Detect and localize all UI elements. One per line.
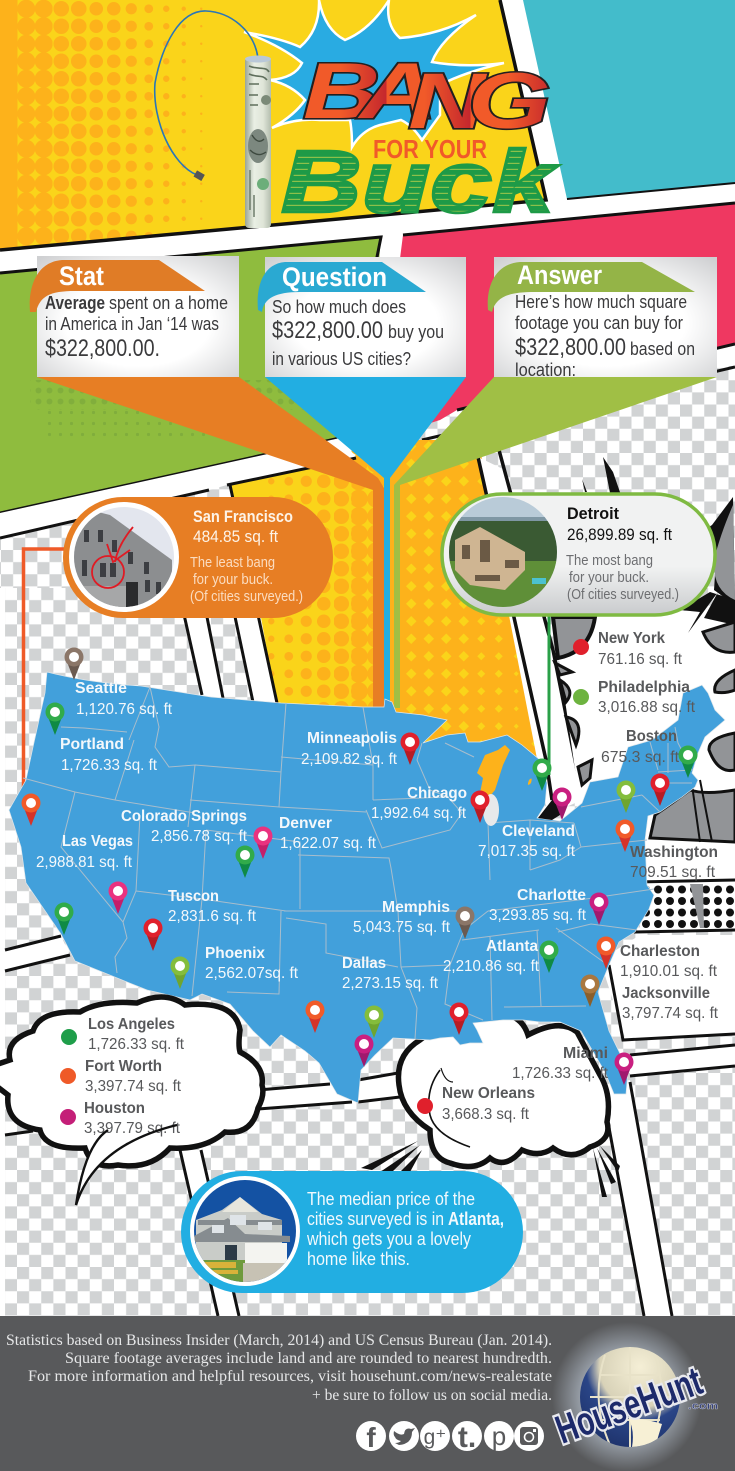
label: Los Angeles: 1,726.33 sq. ft <box>88 1036 185 1053</box>
pin: Seattle <box>64 648 84 680</box>
label: Los Angeles: Los Angeles <box>88 1016 175 1033</box>
footer <box>0 1316 735 1471</box>
text: San Francisco: 484.85 sq. ft <box>193 527 278 546</box>
label: Fort Worth: 3,397.74 sq. ft <box>85 1078 182 1095</box>
text: question body: buy you <box>388 322 444 342</box>
checkerboard backdrop: upper <box>0 366 735 588</box>
pins: map markers <box>22 648 698 1085</box>
label: Fort Worth <box>85 1058 182 1095</box>
label: Boston <box>601 728 680 766</box>
panel: centre halftone <box>232 440 537 757</box>
photo: San Francisco building <box>74 507 174 607</box>
text: Detroit: Detroit <box>567 504 619 523</box>
label: Boston: 675.3 sq. ft <box>601 749 680 766</box>
label: Philadelphia: Philadelphia <box>598 679 690 696</box>
text: answer body: based on <box>630 339 695 359</box>
halftone strip right <box>634 880 735 932</box>
label: Phoenix: 2,562.07sq. ft <box>205 965 299 982</box>
label: Colorado Springs <box>121 808 248 845</box>
label: Atlanta: 2,210.86 sq. ft <box>443 958 540 975</box>
label: Memphis: Memphis <box>382 899 450 916</box>
label: Dallas: 2,273.15 sq. ft <box>342 975 439 992</box>
funnel: blue <box>265 377 466 708</box>
label: Washington: 709.51 sq. ft <box>630 864 716 881</box>
label: New Orleans <box>442 1085 535 1123</box>
pin: Phoenix <box>170 956 190 989</box>
text: stat body: $322,800.00. <box>45 335 160 362</box>
label: Dallas <box>342 955 439 992</box>
text: sources <box>6 1332 552 1404</box>
text: San Francisco: The least bang <box>190 554 275 571</box>
pin: Detroit <box>532 758 552 791</box>
label: Atlanta <box>443 938 540 975</box>
New Orleans speech cloud <box>361 1014 620 1197</box>
label: Tuscon: 2,831.6 sq. ft <box>168 908 257 925</box>
text: Detroit: 26,899.89 sq. ft <box>567 525 672 544</box>
pin: Memphis <box>456 906 474 939</box>
text: Detroit: (Of cities surveyed.) <box>567 586 679 603</box>
pin: Charleston <box>596 936 616 969</box>
label: Jacksonville: 3,797.74 sq. ft <box>622 1005 719 1022</box>
funnel: green <box>394 377 717 708</box>
label: Las Vegas: Las Vegas <box>62 833 133 850</box>
text: answer body: $322,800.00 <box>515 334 626 361</box>
panel: Answer card <box>488 257 717 380</box>
label: Chicago <box>371 785 467 822</box>
pin: Washington <box>616 820 634 852</box>
text: question body <box>272 297 444 369</box>
label: Phoenix: Phoenix <box>205 945 265 962</box>
callout: median price <box>181 1171 523 1293</box>
title word: BANG: BANG <box>303 46 551 145</box>
label: Dallas: Dallas <box>342 955 386 972</box>
photo: house <box>194 1180 296 1282</box>
label: Houston <box>84 1100 181 1137</box>
text: stat body <box>45 293 228 362</box>
label: Cleveland: 7,017.35 sq. ft <box>478 843 576 860</box>
text: median price: The median price of the <box>307 1189 475 1209</box>
text: median price: cities surveyed is in <box>307 1209 444 1229</box>
text: Detroit: for your buck. <box>569 569 649 586</box>
state borders <box>23 687 692 1039</box>
text: stat body: in America in Jan ‘14 was <box>45 314 219 334</box>
label: Minneapolis: Minneapolis <box>307 730 397 747</box>
legend dot: Philadelphia <box>573 689 589 705</box>
icon: fuse <box>155 11 258 181</box>
lakes <box>477 745 564 826</box>
pin: Charlotte <box>590 892 608 925</box>
ribbon: Stat <box>30 260 205 312</box>
label: Miami: Miami <box>563 1045 608 1062</box>
legend dot: New York <box>573 639 589 655</box>
text: San Francisco: (Of cities surveyed.) <box>190 588 303 605</box>
label: Jacksonville <box>622 985 719 1022</box>
label: Cleveland: Cleveland <box>502 823 575 840</box>
pin: New York <box>650 774 670 806</box>
text: Detroit <box>566 504 679 603</box>
label: Fort Worth: Fort Worth <box>85 1058 162 1075</box>
icon: dollar bill dynamite <box>245 56 271 228</box>
pin: Los Angeles <box>54 902 74 935</box>
label: Washington <box>630 844 718 881</box>
label: Denver <box>279 815 377 852</box>
label: Portland <box>60 736 158 774</box>
label: Tuscon <box>168 888 257 925</box>
label: Tuscon: Tuscon <box>168 888 219 905</box>
pin: Las Vegas <box>108 882 128 914</box>
panel: Stat card <box>30 256 239 377</box>
label: Denver: 1,622.07 sq. ft <box>280 835 377 852</box>
panel: teal <box>523 0 735 199</box>
text: question body: in various US cities? <box>272 349 411 369</box>
social icons <box>356 1421 544 1454</box>
label: Charlotte <box>489 887 587 924</box>
icon: blue explosion burst <box>244 0 504 147</box>
label: New Orleans: New Orleans <box>442 1085 535 1102</box>
text: sources: Statistics based on Business Insider (March, 2014) and US Census Bureau (Jan. 2014). <box>6 1332 552 1349</box>
legend dot: Fort Worth <box>60 1068 76 1084</box>
text: San Francisco <box>190 507 303 605</box>
comic burst: right side <box>553 457 735 882</box>
label: Jacksonville: Jacksonville <box>622 985 710 1002</box>
text: answer body: footage you can buy for <box>515 313 683 333</box>
label: Charleston <box>620 943 718 980</box>
callout: Detroit <box>442 494 715 615</box>
label: Charlotte: 3,293.85 sq. ft <box>489 907 587 924</box>
text: sources: Square footage averages include land and are rounded to nearest hundredth. <box>65 1350 552 1367</box>
callout: San Francisco <box>63 497 333 618</box>
label: Portland: Portland <box>60 736 124 753</box>
label: Minneapolis <box>301 730 398 768</box>
social icons: g⁺ <box>424 1426 446 1449</box>
pin: Philadelphia <box>616 780 636 813</box>
pin: San Francisco <box>22 794 40 826</box>
label: New York <box>598 630 683 668</box>
label: Phoenix <box>205 945 299 982</box>
pin: New Orleans <box>450 1002 468 1035</box>
pin: Tuscon <box>144 918 162 951</box>
speech bubble: west cities <box>0 997 263 1205</box>
funnel: orange <box>37 377 384 708</box>
text: sources: For more information and helpful resources, visit househunt.com/news-realestate <box>28 1368 552 1385</box>
pin: Minneapolis <box>400 732 420 765</box>
text: question body: So how much does <box>272 297 406 317</box>
label: Chicago: 1,992.64 sq. ft <box>371 805 467 822</box>
label: Philadelphia <box>598 679 696 716</box>
label: Charleston: Charleston <box>620 943 700 960</box>
label: Memphis <box>353 899 451 936</box>
logo: HouseHunt: .com <box>688 1401 718 1412</box>
comic strips and frame lines <box>0 438 735 1316</box>
text: San Francisco: San Francisco <box>193 507 293 526</box>
label: Denver: Denver <box>279 815 332 832</box>
label: Minneapolis: 2,109.82 sq. ft <box>301 751 398 768</box>
legend dot: New Orleans <box>417 1098 433 1114</box>
title words: FOR YOUR: FOR YOUR <box>373 134 487 164</box>
text: median price: which gets you a lovely <box>306 1229 471 1249</box>
label: Memphis: 5,043.75 sq. ft <box>353 919 451 936</box>
text: stat body: spent on a home <box>109 293 228 313</box>
label: Las Vegas <box>36 833 133 871</box>
label: New York: New York <box>598 630 665 647</box>
label: Colorado Springs: Colorado Springs <box>121 808 247 825</box>
label: Seattle <box>75 680 173 718</box>
social icons: t. <box>458 1421 476 1454</box>
social icons: f <box>366 1422 376 1453</box>
text: stat body: Average <box>45 293 105 313</box>
heading: Question: Question <box>282 262 387 292</box>
speech bubble tail <box>76 1125 177 1205</box>
pin: Portland <box>46 702 64 735</box>
pin: Chicago <box>470 790 490 823</box>
photo: Detroit mansion <box>449 497 557 607</box>
map: United States <box>9 672 725 1103</box>
label: Washington: Washington <box>630 844 718 861</box>
checkerboard backdrop: lower <box>5 588 735 1316</box>
text: median price <box>306 1189 504 1269</box>
label: Seattle: 1,120.76 sq. ft <box>76 701 173 718</box>
label: Philadelphia: 3,016.88 sq. ft <box>598 699 696 716</box>
panel: yellow halftone top panel <box>0 0 546 250</box>
text: answer body: location: <box>515 360 576 380</box>
label: Charleston: 1,910.01 sq. ft <box>620 963 718 980</box>
legend dot: Los Angeles <box>61 1029 77 1045</box>
title word: Buck: Buck <box>281 133 560 231</box>
connector: San Francisco <box>24 549 64 800</box>
pin: Jacksonville <box>580 974 600 1007</box>
label: Houston: 3,397.79 sq. ft <box>84 1120 181 1137</box>
label: Las Vegas: 2,988.81 sq. ft <box>36 854 133 871</box>
text: answer body <box>515 292 695 380</box>
pin: Houston <box>354 1034 374 1067</box>
ribbon: Question <box>258 262 426 312</box>
label: Portland: 1,726.33 sq. ft <box>61 757 158 774</box>
legend dot: Houston <box>60 1109 76 1125</box>
label: Cleveland <box>478 823 576 860</box>
label: New York: 761.16 sq. ft <box>598 651 683 668</box>
divider lines under pink panel <box>422 367 735 440</box>
pin: Colorado Springs <box>254 826 272 859</box>
heading: Stat: Stat <box>59 261 104 291</box>
label: Atlanta: Atlanta <box>486 938 538 955</box>
text: Detroit: The most bang <box>566 552 653 569</box>
title <box>281 46 560 231</box>
pin: Atlanta <box>540 940 558 973</box>
connector: Detroit <box>548 610 550 775</box>
panel: green <box>0 237 381 513</box>
social icons: p <box>492 1421 506 1451</box>
panel: Question card <box>258 257 466 377</box>
label: Los Angeles <box>88 1016 185 1053</box>
text: median price: home like this. <box>307 1249 410 1269</box>
label: Houston: Houston <box>84 1100 145 1117</box>
text: median price: Atlanta, <box>448 1209 504 1229</box>
pin: Cleveland <box>552 788 572 820</box>
ribbon: Answer <box>488 262 695 312</box>
panel: pink <box>377 203 735 440</box>
pin: Denver <box>236 846 254 878</box>
label: New Orleans: 3,668.3 sq. ft <box>442 1106 530 1123</box>
label: Miami: 1,726.33 sq. ft <box>512 1065 609 1082</box>
label: Charlotte: Charlotte <box>517 887 586 904</box>
heading: Answer: Answer <box>517 260 602 290</box>
label: Boston: Boston <box>626 728 677 745</box>
label: Miami <box>512 1045 609 1082</box>
pin: Miami <box>614 1052 634 1085</box>
text: answer body: Here’s how much square <box>515 292 687 312</box>
text: question body: $322,800.00 <box>272 317 383 344</box>
text: sources: + be sure to follow us on social media. <box>312 1387 552 1404</box>
pin: Boston <box>678 746 698 778</box>
pin: Dallas <box>364 1006 384 1038</box>
label: Seattle: Seattle <box>75 680 127 697</box>
label: Colorado Springs: 2,856.78 sq. ft <box>151 828 248 845</box>
pin: Fort Worth <box>306 1000 324 1033</box>
label: Chicago: Chicago <box>407 785 467 802</box>
text: San Francisco: for your buck. <box>193 571 273 588</box>
